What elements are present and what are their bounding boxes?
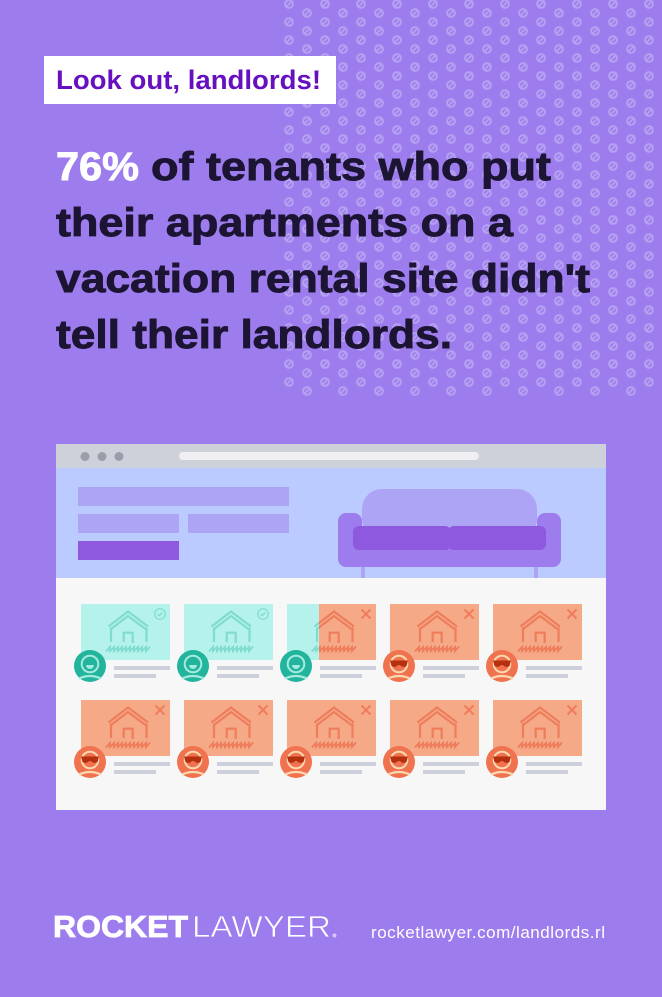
listing 8: flagged <box>280 700 376 778</box>
label: look out, landlords: Look out, landlords! <box>56 65 321 95</box>
headline: their apartments on a <box>56 201 514 245</box>
logo: Rocket Lawyer: LAWYER <box>192 909 331 944</box>
listing 9: flagged <box>383 700 479 778</box>
listing 4: flagged <box>383 604 479 682</box>
browser top bar <box>56 444 606 468</box>
headline: of tenants who put <box>151 145 551 189</box>
listing 6: flagged <box>74 700 170 778</box>
listings panel <box>56 578 606 810</box>
headline: tell their landlords. <box>56 313 452 357</box>
listing 3: partly flagged <box>280 604 376 682</box>
listing 5: flagged <box>486 604 582 682</box>
search form <box>78 487 289 560</box>
headline: 76% <box>56 145 139 189</box>
logo: Rocket Lawyer <box>53 909 336 944</box>
website url: rocketlawyer.com/landlords.rl <box>371 923 605 942</box>
listing 1: approved <box>74 604 170 682</box>
icon: sofa <box>338 489 561 578</box>
logo: Rocket Lawyer: ROCKET <box>53 909 188 944</box>
headline: vacation rental site didn't <box>56 257 590 301</box>
browser window <box>56 444 606 810</box>
dot pattern <box>283 0 662 397</box>
listing 7: flagged <box>177 700 273 778</box>
listing 2: approved <box>177 604 273 682</box>
headline <box>56 145 590 357</box>
label: look out, landlords <box>44 56 336 104</box>
listing 10: flagged <box>486 700 582 778</box>
hero panel <box>56 468 606 578</box>
